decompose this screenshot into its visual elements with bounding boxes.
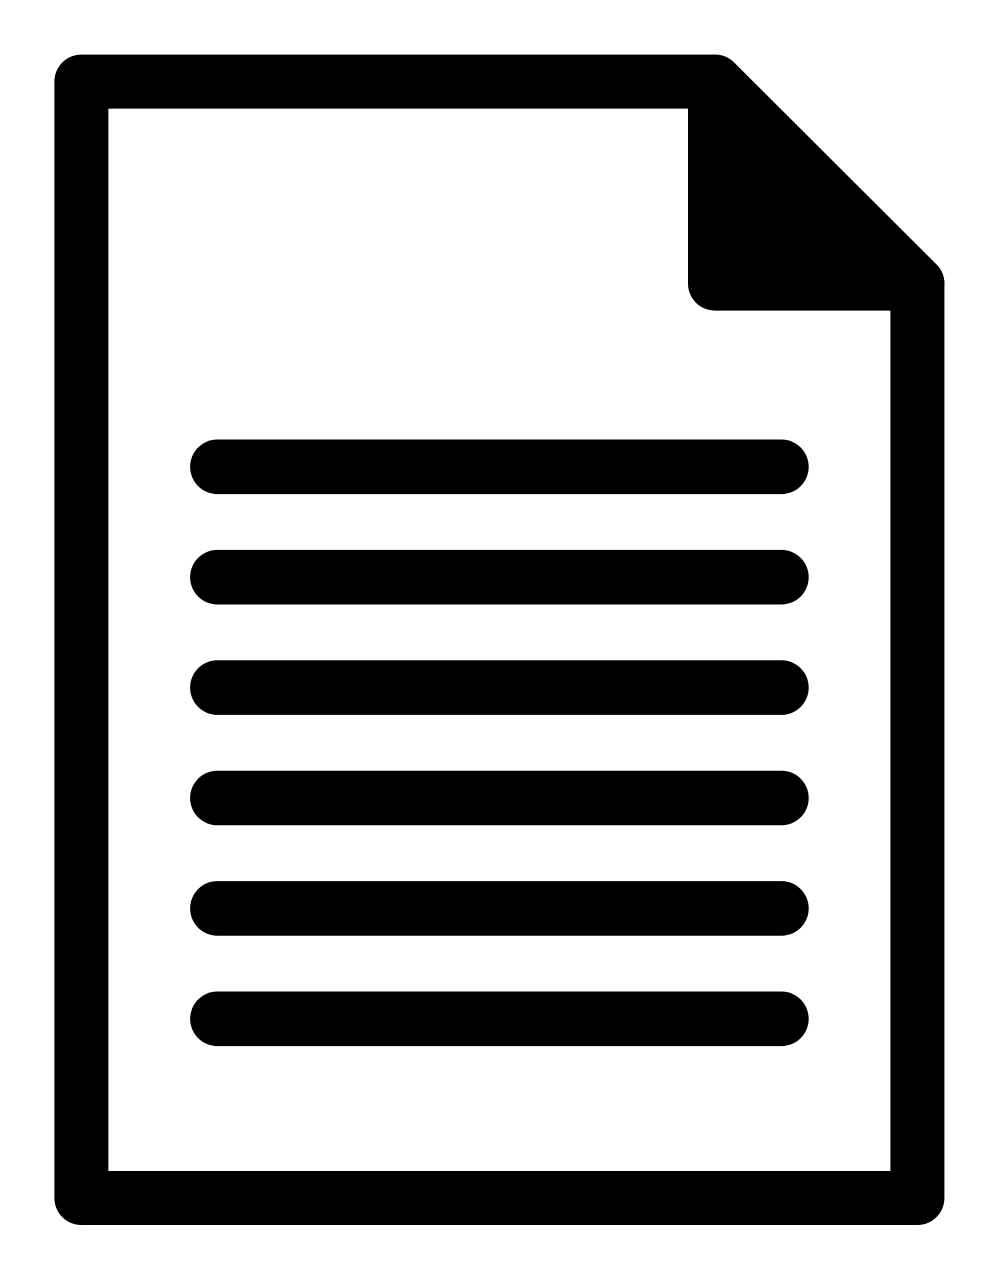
page outline (81, 82, 917, 1198)
folded corner (715, 82, 917, 284)
text lines (217, 467, 781, 1019)
